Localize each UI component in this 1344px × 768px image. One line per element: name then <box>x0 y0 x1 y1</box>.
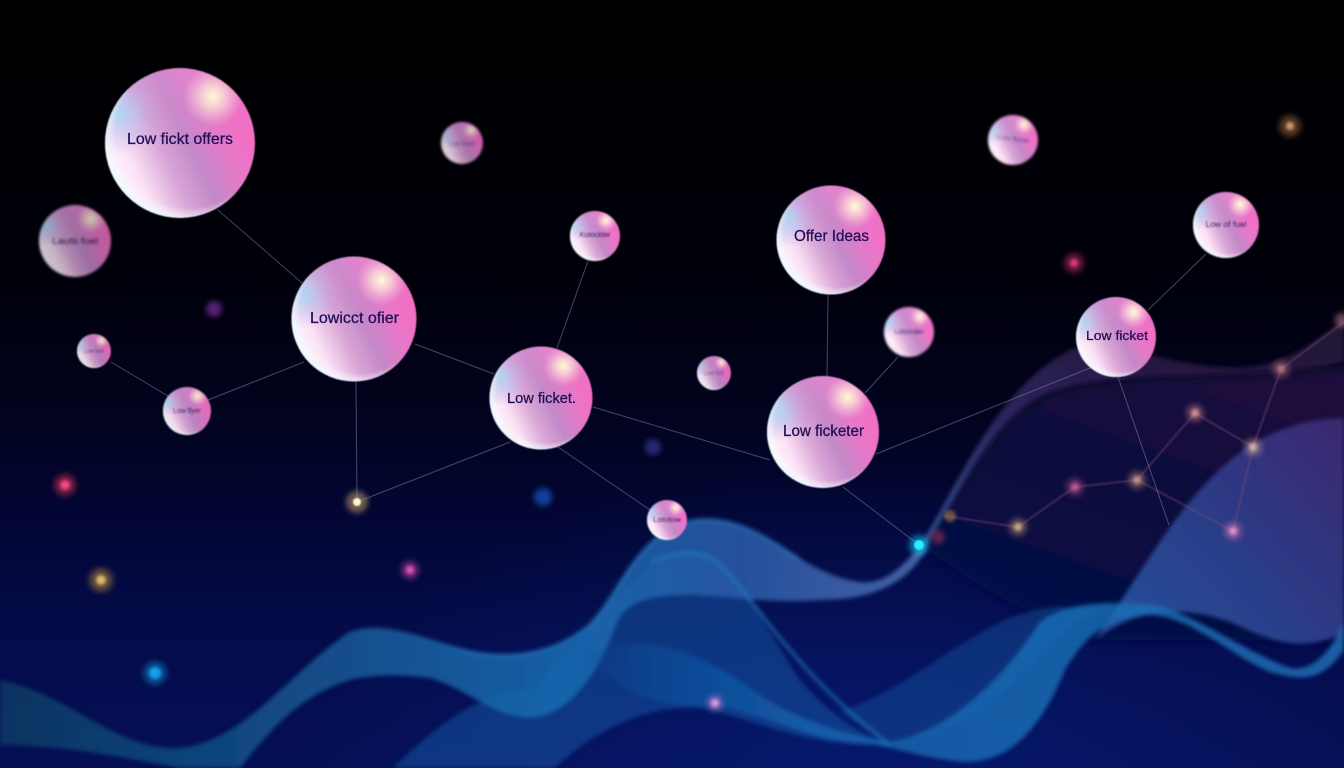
particle: amber <box>1279 115 1301 137</box>
bubble: Offer Ideas: Offer Ideas <box>794 228 869 245</box>
wave: thin bright crest <box>650 553 890 745</box>
wave: left crest highlight <box>350 520 800 656</box>
glowing particles <box>54 115 1301 711</box>
node <box>1335 313 1344 327</box>
network chart nodes <box>931 313 1344 544</box>
bubble: right of Offer Ideas <box>884 307 934 357</box>
particle: bright white <box>346 491 368 513</box>
bubble: left blurred <box>39 205 111 277</box>
bubble: top small <box>441 122 483 164</box>
bubble: far left small: Low fuel <box>84 349 104 355</box>
bubble: centre tiny: Low tick <box>704 371 725 377</box>
node <box>1224 522 1242 540</box>
particle: purple <box>206 301 222 317</box>
bubble: Low ticket right: Low ficket <box>1086 328 1148 343</box>
bubble: left blurred: Lauts fuel <box>52 236 98 246</box>
bubble: centre top small <box>570 211 620 261</box>
particle: pink <box>1064 253 1084 273</box>
node <box>1244 438 1262 456</box>
particle: tan <box>89 568 113 592</box>
node <box>1128 471 1146 489</box>
wave: lower-middle ribbon <box>393 552 895 768</box>
bubble: Low ticket offers <box>105 68 255 218</box>
node <box>1186 404 1204 422</box>
node <box>931 530 945 544</box>
bubble: Offer Ideas <box>776 186 886 294</box>
bubble: lower left small: Low fiyer <box>173 408 202 415</box>
bubble: bottom tiny <box>647 500 687 540</box>
wave: purple ribbon <box>908 320 1344 562</box>
flowing waves <box>0 320 1344 768</box>
wave: faint mid ribbon <box>840 606 1100 745</box>
wave: right bright ribbon <box>585 603 1344 762</box>
bubble: top right small: Low ficket <box>997 134 1029 145</box>
bubble: Low ticket centre <box>490 346 592 450</box>
wave: left and top ribbon <box>0 520 926 768</box>
bubble: Low ticket offer: Lowicct ofier <box>310 310 399 327</box>
bubble: Low ticket right <box>1076 297 1156 377</box>
bubble: centre top small: Kutockter <box>580 232 611 239</box>
particle: red-pink <box>54 474 76 496</box>
bubble: lower left small <box>163 387 211 435</box>
particle: lilac <box>707 695 723 711</box>
bubble: far right: Low of fuel <box>1206 220 1247 229</box>
bubble: Low ticket centre: Low ficket. <box>507 390 576 407</box>
particle: blue <box>534 488 552 506</box>
connector lines <box>111 210 1206 545</box>
bubble: top right small <box>988 115 1038 165</box>
particle: dim blue <box>645 439 661 455</box>
background purple tint below ribbon <box>925 362 1344 640</box>
node <box>1009 518 1027 536</box>
particle: bright cyan <box>909 535 929 555</box>
network chart lines <box>945 322 1344 531</box>
bubble: right of Offer Ideas: Lokocder <box>894 329 925 336</box>
particle: cyan <box>143 661 167 685</box>
bubble: Low ticket offer <box>292 256 416 382</box>
node <box>1066 478 1084 496</box>
bubble: Low ticketer <box>767 376 879 488</box>
bubble: top small: Low ticket <box>449 141 475 148</box>
bubble: far right <box>1193 192 1259 258</box>
wave: large purple hill <box>1095 418 1344 644</box>
bubble: Low ticketer: Low ficketer <box>783 423 864 440</box>
bubble: centre tiny <box>697 356 731 390</box>
node <box>1272 360 1290 378</box>
bubble: bottom tiny: Lotolow <box>653 517 682 524</box>
bubble: Low ticket offers: Low fickt offers <box>127 131 233 148</box>
particle: magenta <box>401 561 419 579</box>
node <box>944 510 956 522</box>
bubble: far left small <box>77 334 111 368</box>
